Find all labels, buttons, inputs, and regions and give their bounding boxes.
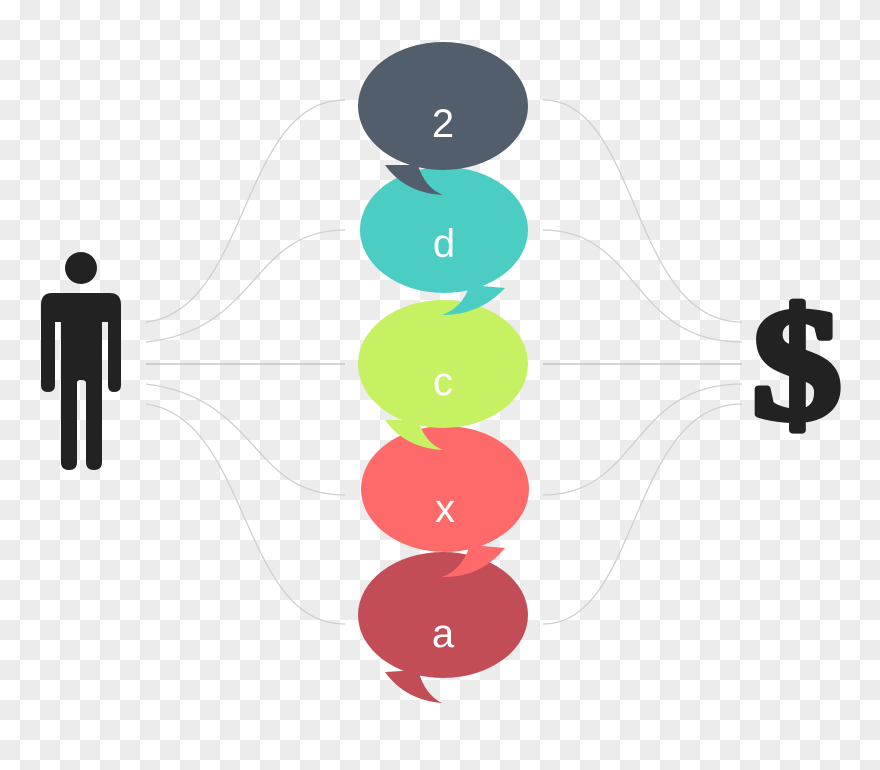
bubble: c: c [433,360,453,404]
bubble: 2: 2 [432,102,454,146]
connector lines [146,100,742,624]
icon: dollar sign: $ [752,276,842,453]
bubble: x: x [435,487,455,531]
bubble: d: d [433,222,455,266]
bubble: a [358,552,528,703]
bubble: d [360,167,528,315]
bubble: x [361,426,529,577]
bubble: a: a [432,612,455,656]
bubble: c [358,300,528,450]
bubble: 2 [358,42,528,195]
icon: person [41,252,121,470]
